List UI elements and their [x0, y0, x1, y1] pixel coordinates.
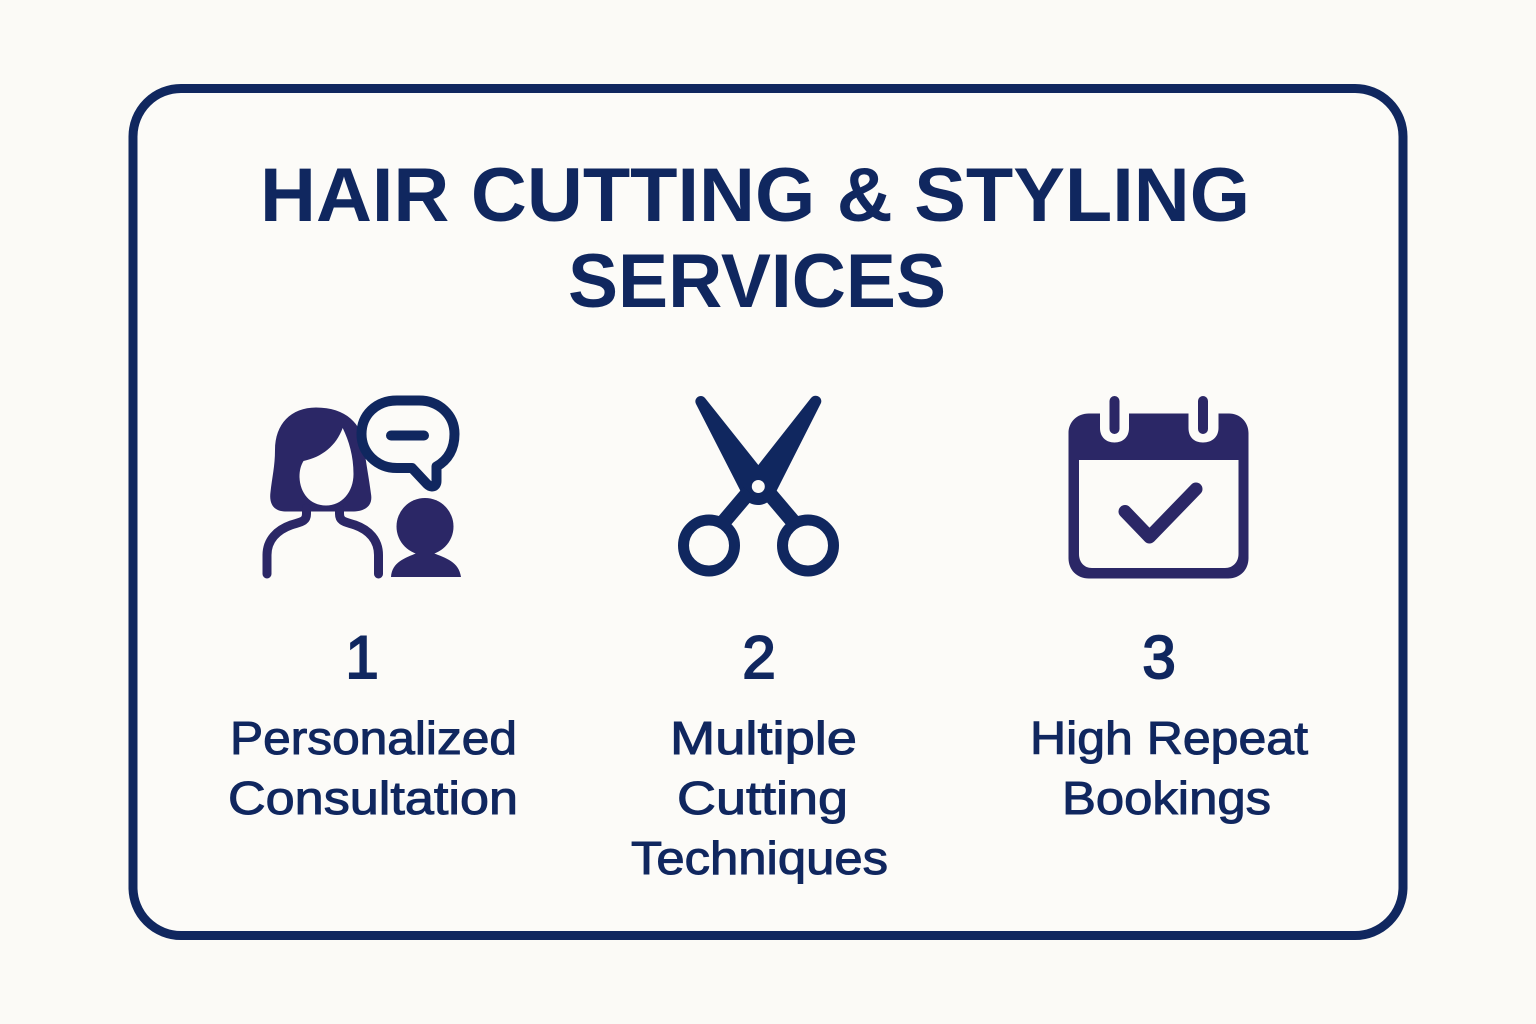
icon: scissors — [684, 396, 834, 571]
label: High Repeat Bookings: Bookings — [1062, 772, 1271, 824]
label: Personalized Consultation: Consultation — [228, 772, 518, 824]
label: High Repeat Bookings — [1030, 712, 1308, 824]
column 3: high repeat bookings — [1030, 401, 1308, 824]
panel: rounded frame — [133, 88, 1403, 936]
icon: woman with speech bubble and client — [267, 400, 461, 577]
number 1: 1 — [345, 624, 379, 691]
title: HAIR CUTTING & STYLING — [260, 153, 1250, 238]
label: Multiple Cutting Techniques: Cutting — [677, 772, 848, 824]
title — [260, 153, 1250, 324]
label: Personalized Consultation — [228, 712, 518, 824]
label: Personalized Consultation: Personalized — [230, 712, 517, 764]
column 2: multiple cutting techniques — [631, 396, 888, 884]
icon: calendar with checkmark — [1068, 401, 1248, 578]
label: High Repeat Bookings: High Repeat — [1030, 712, 1308, 764]
label: Multiple Cutting Techniques: Techniques — [631, 832, 888, 884]
label: Multiple Cutting Techniques: Multiple — [670, 712, 857, 764]
number 3: 3 — [1142, 624, 1176, 691]
label: Multiple Cutting Techniques — [631, 712, 888, 884]
column 1: personalized consultation — [228, 400, 518, 824]
title: SERVICES — [568, 239, 946, 324]
number 2: 2 — [742, 624, 776, 691]
